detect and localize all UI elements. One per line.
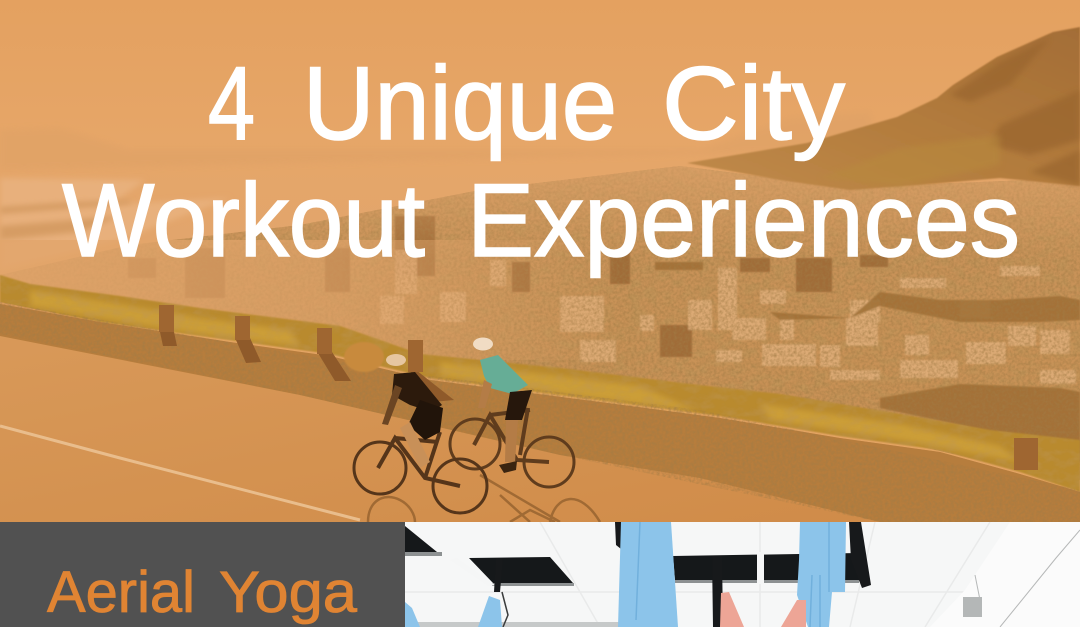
title line 2: Experiences xyxy=(467,163,1020,279)
title line 1: Unique xyxy=(303,46,617,162)
rider torso and jersey xyxy=(480,355,528,394)
city fine texture xyxy=(178,168,1080,454)
cyclist shadows on the road xyxy=(368,475,600,522)
title line 1: 4 xyxy=(208,46,255,162)
blue fabric folds xyxy=(636,522,829,627)
rider legs xyxy=(400,422,430,468)
bush texture xyxy=(0,270,1080,495)
distant hills xyxy=(0,112,880,170)
post shadows xyxy=(160,332,454,402)
rider helmet xyxy=(473,338,493,350)
wall lines xyxy=(975,530,1080,627)
road edge line xyxy=(0,426,360,520)
bushes along the road xyxy=(0,275,1080,492)
rider shorts xyxy=(408,400,443,440)
mountain shading xyxy=(950,38,1080,186)
rider shoe xyxy=(499,461,517,473)
heading text xyxy=(47,560,358,625)
rider helmet xyxy=(386,354,406,366)
dry shrub xyxy=(344,342,384,372)
gravel shoulder xyxy=(0,304,1080,522)
sky xyxy=(0,0,1080,240)
cyclist: front rider xyxy=(354,354,487,513)
harbour piers xyxy=(0,200,130,240)
rider arm xyxy=(382,385,402,425)
road surface xyxy=(0,302,880,522)
heading text: Aerial xyxy=(47,560,195,625)
black straps xyxy=(494,522,871,627)
rider legs xyxy=(505,420,518,462)
white rail across panel xyxy=(450,552,764,586)
title line 1: City xyxy=(662,46,845,162)
title line 1 xyxy=(208,46,845,162)
rear bicycle xyxy=(450,408,574,487)
title xyxy=(62,46,1020,279)
rider shorts xyxy=(505,390,532,420)
small strap loop xyxy=(502,592,508,627)
fence posts and shadows xyxy=(159,305,1038,470)
title line 2 xyxy=(62,163,1020,279)
mountain xyxy=(687,27,1080,190)
city buildings xyxy=(128,216,1080,462)
bottom pipe xyxy=(417,622,627,627)
city blotch texture xyxy=(0,160,1080,490)
wall speaker box xyxy=(963,597,982,617)
rider torso xyxy=(392,372,442,407)
city base xyxy=(174,166,1080,467)
posts xyxy=(159,305,1038,470)
bush highlights xyxy=(30,290,1020,462)
pink hammock fabric xyxy=(720,592,806,627)
blue hammock fabric xyxy=(405,522,846,627)
gravel texture xyxy=(0,300,1080,522)
open ceiling panels xyxy=(405,526,859,583)
title line 2: Workout xyxy=(62,163,425,279)
photo: aerial yoga studio ceiling xyxy=(405,522,1080,627)
ceiling grid xyxy=(405,522,1000,627)
front bicycle xyxy=(354,432,487,513)
city haze from above xyxy=(271,166,1080,240)
city haze from the left xyxy=(0,240,544,360)
wall wedge xyxy=(930,522,1080,627)
cyclist: rear rider xyxy=(450,338,574,487)
heading text: Yoga xyxy=(219,560,358,625)
panel: aerial yoga heading xyxy=(0,522,405,627)
bay water xyxy=(0,178,218,240)
grey ceiling rails xyxy=(405,552,859,586)
